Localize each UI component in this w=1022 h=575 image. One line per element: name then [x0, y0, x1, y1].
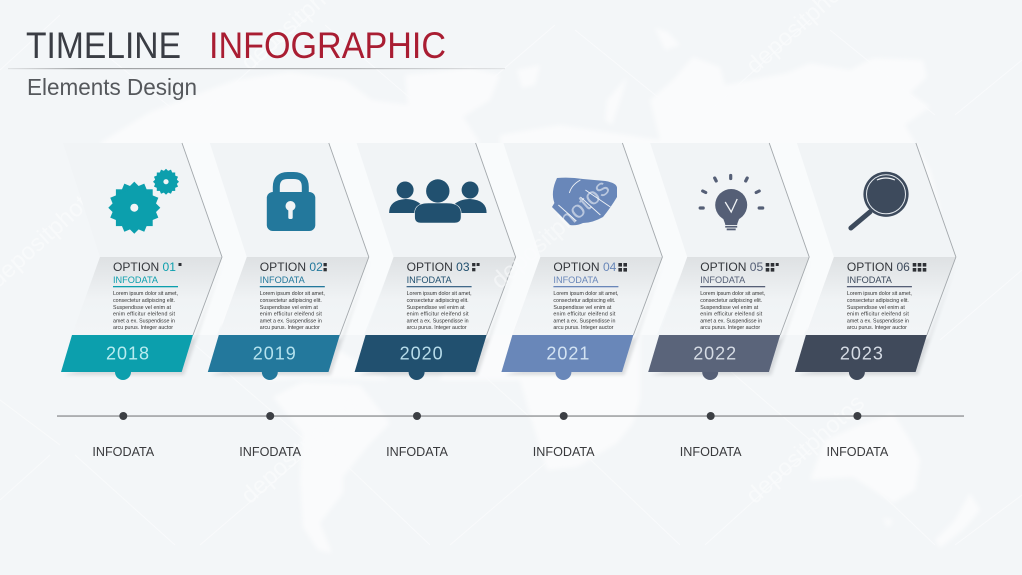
body text 6: Suspendisse vel enim at	[847, 305, 905, 311]
body text 5: arcu purus. Integer auctor	[700, 325, 760, 331]
body text 2: amet a ex. Suspendisse in	[260, 318, 322, 324]
step marker 6	[913, 263, 926, 272]
body text 1: arcu purus. Integer auctor	[113, 325, 173, 331]
divider 5	[700, 286, 765, 287]
divider 2	[260, 286, 325, 287]
body text 5: amet a ex. Suspendisse in	[700, 318, 762, 324]
card 6: 2023	[795, 143, 958, 380]
card 2: 2019	[208, 143, 371, 380]
body text 1: enim efficitur eleifend sit	[113, 312, 176, 318]
divider 6	[847, 286, 912, 287]
card 4: 2021	[501, 143, 664, 380]
year 2: 2019	[253, 344, 296, 364]
year tab 6	[849, 364, 865, 380]
body text 2: enim efficitur eleifend sit	[260, 312, 322, 318]
year 1: 2018	[106, 344, 149, 364]
card 1: 2018	[61, 143, 224, 380]
step marker 2	[324, 263, 327, 271]
body text 1: consectetur adipiscing elit.	[113, 298, 175, 304]
title: TIMELINE	[26, 25, 181, 66]
body text 1: amet a ex. Suspendisse in	[113, 318, 175, 324]
white chevron bands between cards	[182, 143, 834, 335]
icon: magnifying glass	[851, 172, 909, 228]
body text 6: arcu purus. Integer auctor	[847, 325, 907, 331]
watermark text: depositphotos	[236, 389, 365, 509]
body text 4: consectetur adipiscing elit.	[553, 298, 615, 304]
timeline labels: INFODATA	[92, 445, 155, 459]
title	[26, 25, 446, 66]
year 6: 2023	[840, 344, 883, 364]
body text 4: arcu purus. Integer auctor	[553, 325, 614, 331]
body text 3: enim efficitur eleifend sit	[407, 312, 469, 318]
divider 3	[407, 286, 472, 287]
option heading 5: OPTION 05	[700, 260, 764, 274]
body text 2: Suspendisse vel enim at	[260, 305, 318, 311]
body text 2: arcu purus. Integer auctor	[260, 325, 320, 331]
body text 6: amet a ex. Suspendisse in	[847, 318, 909, 324]
year tab 3	[409, 364, 425, 380]
body text 3: Lorem ipsum dolor sit amet,	[407, 291, 472, 297]
world map	[100, 28, 980, 553]
step marker 5	[766, 263, 779, 272]
option heading 4: OPTION 04	[553, 260, 617, 274]
timeline labels: INFODATA	[386, 445, 448, 459]
body text 2: consectetur adipiscing elit.	[260, 298, 322, 304]
step marker 4	[618, 263, 627, 272]
sub heading 2: INFODATA	[260, 275, 306, 285]
option heading 2: OPTION 02	[260, 260, 323, 274]
card 5: 2022	[648, 143, 811, 380]
body text 4: Lorem ipsum dolor sit amet,	[553, 291, 618, 297]
year 5: 2022	[693, 344, 736, 364]
icon: padlock	[267, 176, 315, 231]
timeline	[57, 412, 964, 420]
sub heading 1: INFODATA	[113, 275, 159, 285]
body text 3: Suspendisse vel enim at	[407, 305, 465, 311]
body text 3: amet a ex. Suspendisse in	[407, 318, 469, 324]
timeline dots	[119, 412, 861, 420]
body text 3: arcu purus. Integer auctor	[407, 325, 467, 331]
option heading 6: OPTION 06	[847, 260, 910, 274]
body text 2: Lorem ipsum dolor sit amet,	[260, 291, 325, 297]
timeline labels: INFODATA	[239, 445, 302, 459]
year tab 4	[555, 364, 571, 380]
icon: light bulb	[700, 176, 763, 230]
body text 6: consectetur adipiscing elit.	[847, 298, 909, 304]
body text 5: enim efficitur eleifend sit	[700, 312, 763, 318]
body text 4: Suspendisse vel enim at	[553, 305, 612, 311]
icon: gears	[108, 169, 179, 234]
body text 4: amet a ex. Suspendisse in	[553, 318, 615, 324]
title: INFOGRAPHIC	[209, 25, 446, 66]
option heading 3: OPTION 03	[407, 260, 470, 274]
year tab 1	[115, 364, 131, 380]
icon: people	[389, 179, 487, 223]
sub heading 6: INFODATA	[847, 275, 893, 285]
sub heading 5: INFODATA	[700, 275, 746, 285]
year tab 5	[702, 364, 718, 380]
body text 1: Suspendisse vel enim at	[113, 305, 172, 311]
card 3: 2020	[355, 143, 518, 380]
step marker 3	[472, 263, 480, 271]
divider 4	[553, 286, 618, 287]
timeline labels: INFODATA	[533, 445, 595, 459]
step marker 1	[178, 263, 182, 266]
body text 5: Suspendisse vel enim at	[700, 305, 759, 311]
divider 1	[113, 286, 178, 287]
timeline labels: INFODATA	[680, 445, 742, 459]
option heading 1: OPTION 01	[113, 260, 176, 274]
watermark text: depositphotos	[741, 389, 870, 509]
icon: handshake	[552, 178, 617, 225]
body text 3: consectetur adipiscing elit.	[407, 298, 469, 304]
sub heading 4: INFODATA	[553, 275, 599, 285]
sub heading 3: INFODATA	[407, 275, 452, 285]
year tab 2	[262, 364, 278, 380]
body text 6: Lorem ipsum dolor sit amet,	[847, 291, 912, 297]
body text 6: enim efficitur eleifend sit	[847, 312, 909, 318]
timeline labels: INFODATA	[826, 445, 889, 459]
body text 5: Lorem ipsum dolor sit amet,	[700, 291, 765, 297]
year 4: 2021	[546, 344, 589, 364]
body text 5: consectetur adipiscing elit.	[700, 298, 762, 304]
body text 1: Lorem ipsum dolor sit amet,	[113, 291, 178, 297]
watermark text	[0, 0, 870, 509]
timeline labels	[92, 445, 889, 459]
watermark over cards: depositphotos	[486, 174, 615, 294]
body text 4: enim efficitur eleifend sit	[553, 312, 616, 318]
title rule	[8, 68, 505, 69]
subtitle: Elements Design	[27, 74, 197, 100]
year 3: 2020	[400, 344, 443, 364]
